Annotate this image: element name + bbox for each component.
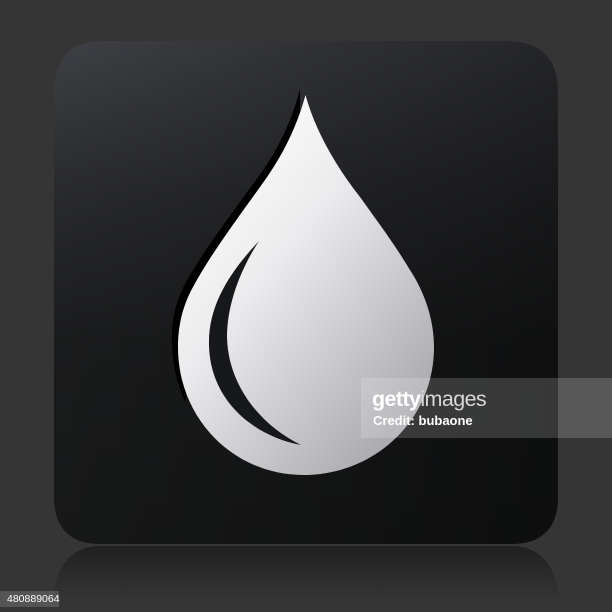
drop highlight crescent: [209, 241, 301, 445]
icon: water drop: [172, 89, 434, 475]
black rounded square button: [54, 41, 558, 544]
watermark credit: Credit: bubaone: [373, 413, 473, 428]
drop shadow: [172, 89, 300, 402]
watermark logo: gettyimages: [372, 387, 486, 411]
image id: [0, 591, 59, 607]
watermark: [361, 378, 612, 438]
drop body: [178, 95, 434, 475]
image id: 480889064: [7, 593, 60, 605]
button reflection: [54, 546, 558, 600]
